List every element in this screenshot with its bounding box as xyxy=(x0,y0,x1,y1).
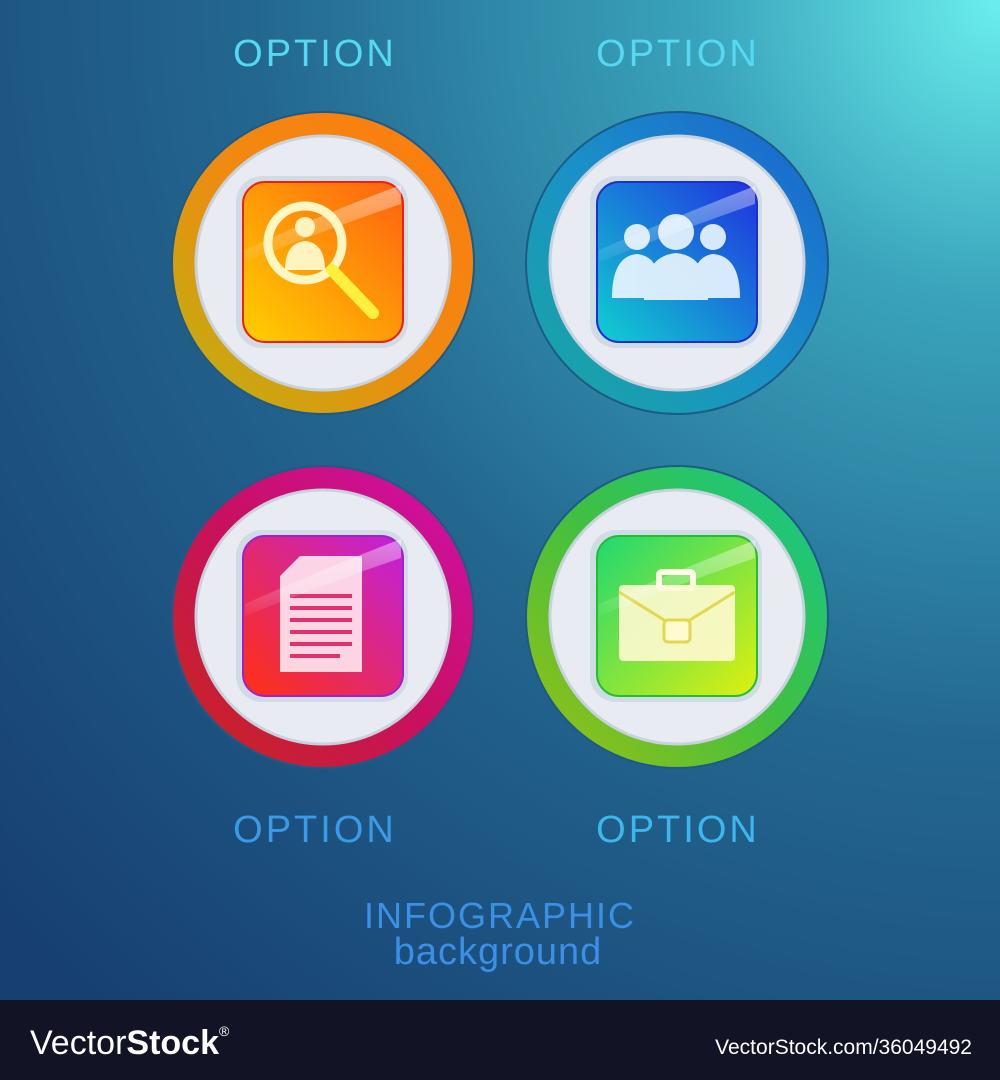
icon: briefcase xyxy=(619,572,735,661)
heading: infographic background xyxy=(364,895,636,973)
title: bottom right OPTION: OPTION xyxy=(596,809,760,851)
footer bar: VectorStock.com/36049492 xyxy=(715,1036,972,1059)
footer bar: ® xyxy=(219,1023,230,1039)
icon: document xyxy=(280,556,362,672)
heading: infographic background: INFOGRAPHIC xyxy=(364,895,636,936)
icon: people group xyxy=(612,214,740,300)
heading: infographic background: background xyxy=(394,931,602,973)
panel: search option xyxy=(172,112,474,414)
footer bar: VectorStock xyxy=(30,1024,219,1062)
panel: briefcase option xyxy=(526,466,828,768)
panel: team option xyxy=(526,112,828,414)
title: top left OPTION: OPTION xyxy=(233,33,397,75)
title: bottom left OPTION: OPTION xyxy=(233,809,397,851)
title: top right OPTION: OPTION xyxy=(596,33,760,75)
icon: magnifier with person xyxy=(268,206,373,313)
footer bar xyxy=(0,1000,1000,1080)
panel: document option xyxy=(172,466,474,768)
